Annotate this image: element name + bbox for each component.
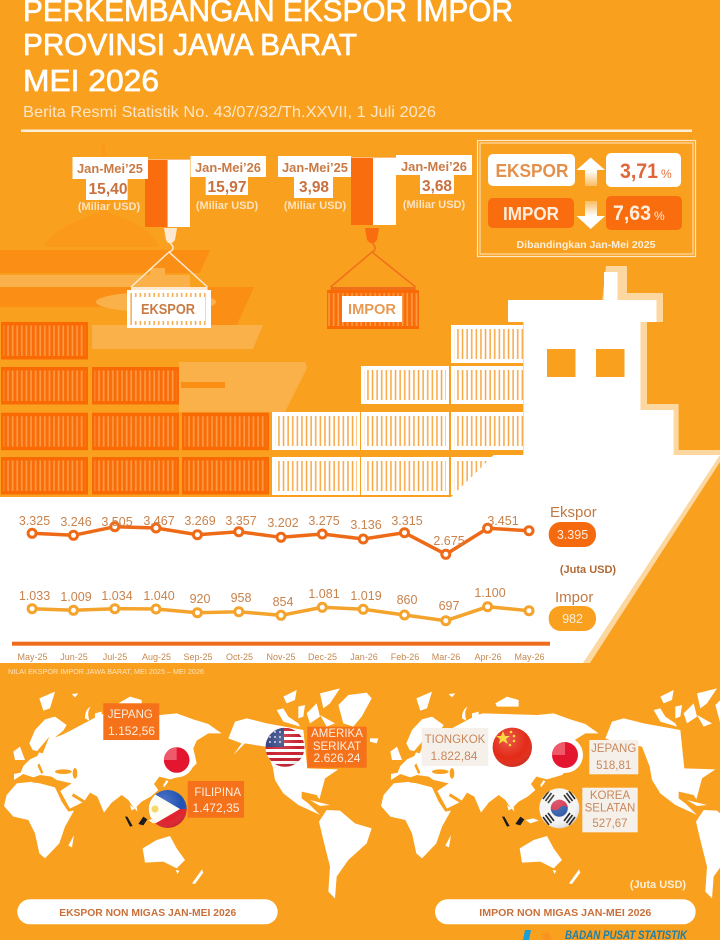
- line chart: impor: 860: [397, 593, 417, 607]
- unit note: map: (Juta USD): [630, 879, 686, 891]
- line chart: ekspor: 3.275: [308, 514, 340, 528]
- white import containers: [272, 325, 539, 497]
- world map: impor: [381, 688, 720, 898]
- line chart: ekspor: 3.325: [19, 514, 50, 528]
- faded port crane and dome backdrop: [0, 145, 307, 412]
- label: ekspor 2026: [190, 156, 266, 212]
- line chart: impor: 1.100: [474, 586, 506, 600]
- month labels: Jan-26: [350, 652, 378, 662]
- hanging container: ekspor: [127, 228, 211, 328]
- impor percent: %: [654, 209, 665, 223]
- callout: jepang ekspor: [103, 703, 159, 740]
- icon: china flag: [493, 728, 532, 767]
- ekspor percent: 3,71: [620, 160, 658, 183]
- orange export containers: [1, 322, 269, 494]
- month labels: Apr-26: [474, 652, 502, 662]
- callout: jepang impor: JEPANG: [591, 743, 636, 755]
- ekspor percent: %: [661, 167, 672, 181]
- title: [23, 0, 513, 98]
- callout: tiongkok: [422, 728, 488, 766]
- line chart: impor: 920: [190, 592, 210, 606]
- line chart: ekspor: 2.675: [433, 534, 465, 548]
- callout: filipina: FILIPINA: [194, 787, 241, 799]
- month labels: [17, 652, 545, 662]
- pill: ekspor non migas: EKSPOR NON MIGAS JAN-MEI 2026: [59, 907, 236, 919]
- label: impor 2025: Jan-Mei’25: [282, 160, 348, 175]
- line chart: impor: 1.081: [308, 587, 340, 601]
- crane: ekspor values: [72, 156, 266, 227]
- label: impor 2026: 3,68: [422, 178, 452, 195]
- comparison note: Dibandingkan Jan-Mei 2025: [516, 239, 656, 251]
- legend: impor: [549, 589, 596, 631]
- callout: jepang impor: [589, 740, 638, 774]
- panel: growth summary: [478, 140, 696, 256]
- line chart: impor: 958: [231, 591, 251, 605]
- month labels: Nov-25: [266, 652, 296, 662]
- callout: amerika serikat: [307, 727, 367, 768]
- impor percent: [606, 196, 682, 230]
- line chart: impor: 854: [273, 595, 293, 609]
- line chart: ekspor: 3.357: [225, 514, 257, 528]
- icon: usa flag: [265, 727, 305, 768]
- label: impor 2026: [396, 155, 472, 211]
- line chart: ekspor: 3.246: [60, 515, 92, 529]
- line chart: ekspor: [19, 514, 533, 558]
- impor percent: 7,63: [613, 202, 651, 225]
- month labels: Jul-25: [103, 652, 127, 662]
- icon: philippines flag: [148, 790, 187, 828]
- title: MEI 2026: [23, 63, 159, 98]
- chart axis: [12, 642, 550, 646]
- callout: korea selatan: KOREA: [590, 790, 630, 802]
- logo: badan pusat statistik: [523, 930, 688, 940]
- label: ekspor 2025: Jan-Mei’25: [77, 161, 143, 176]
- white hull and chart area: [0, 272, 720, 663]
- label: ekspor 2026: Jan-Mei’26: [195, 160, 261, 175]
- line chart: impor: [19, 586, 533, 625]
- month labels: May-26: [514, 652, 545, 662]
- icon: south korea flag: [539, 788, 580, 829]
- hanging container: ekspor: EKSPOR: [141, 301, 195, 318]
- chart caption: NILAI EKSPOR IMPOR JAWA BARAT, MEI 2025 – MEI 2026: [8, 669, 204, 676]
- legend: ekspor: [549, 504, 597, 547]
- line chart: impor: 697: [439, 599, 459, 613]
- callout: tiongkok: TIONGKOK: [425, 734, 486, 746]
- pill: impor non migas: [435, 899, 696, 924]
- hanging container: impor: IMPOR: [348, 301, 396, 318]
- label: impor 2026: (Miliar USD): [403, 199, 466, 211]
- line chart: ekspor: 3.505: [101, 515, 133, 529]
- callout: korea selatan: [582, 788, 638, 832]
- callout: jepang ekspor: 1.152,56: [108, 726, 155, 738]
- month labels: Mar-26: [432, 652, 460, 662]
- subtitle: Berita Resmi Statistik No. 43/07/32/Th.XXVII, 1 Juli 2026: [23, 104, 436, 121]
- callout: tiongkok: 1.822,84: [430, 751, 478, 763]
- title: PROVINSI JAWA BARAT: [23, 27, 357, 62]
- line chart: impor: 1.009: [60, 590, 92, 604]
- unit note: (Juta USD): [560, 564, 616, 576]
- line chart: impor: 1.033: [19, 589, 50, 603]
- callout: filipina: [188, 781, 244, 818]
- callout: amerika serikat: AMERIKA: [311, 728, 363, 740]
- month labels: Feb-26: [391, 652, 419, 662]
- callout: jepang impor: 518,81: [596, 760, 631, 772]
- impor label: IMPOR: [503, 204, 559, 224]
- label: ekspor 2026: 15,97: [208, 179, 247, 196]
- ship windows: [547, 349, 624, 377]
- label: impor 2025: [278, 156, 351, 212]
- callout: korea selatan: 527,67: [592, 818, 628, 830]
- month labels: Jun-25: [60, 652, 88, 662]
- month labels: May-25: [17, 652, 48, 662]
- month labels: Oct-25: [226, 652, 253, 662]
- label: impor 2026: Jan-Mei’26: [401, 159, 467, 174]
- ekspor label: EKSPOR: [496, 161, 568, 181]
- month labels: Dec-25: [308, 652, 337, 662]
- ekspor label: [488, 154, 575, 186]
- pill: ekspor non migas: [17, 899, 278, 924]
- label: impor 2025: 3,98: [299, 179, 329, 196]
- callout: amerika serikat: 2.626,24: [314, 753, 361, 765]
- month labels: Aug-25: [142, 652, 171, 662]
- line chart: ekspor: 3.451: [487, 514, 519, 528]
- ekspor percent: [606, 153, 681, 187]
- line chart: impor: 1.040: [143, 589, 175, 603]
- callout: korea selatan: SELATAN: [585, 802, 635, 814]
- line chart: ekspor: 3.202: [267, 516, 299, 530]
- impor label: [488, 198, 574, 228]
- icon: arrow down: [576, 201, 605, 229]
- legend: impor: Impor: [555, 589, 593, 606]
- bar pair: impor: [351, 157, 396, 225]
- label: ekspor 2025: [72, 157, 148, 213]
- line chart: ekspor: 3.136: [350, 518, 382, 532]
- bar pair: ekspor: [145, 159, 190, 227]
- icon: japan flag (ekspor): [159, 742, 194, 778]
- line chart: impor: 1.034: [101, 589, 133, 603]
- world map: ekspor: [4, 688, 378, 898]
- icon: arrow up: [576, 158, 605, 186]
- hanging container: impor: [327, 228, 419, 329]
- legend: ekspor: 3.395: [557, 528, 588, 542]
- callout: filipina: 1.472,35: [192, 803, 240, 815]
- line chart: ekspor: 3.315: [391, 514, 423, 528]
- icon: japan flag (impor): [547, 737, 583, 773]
- line chart: ekspor: 3.467: [143, 514, 175, 528]
- month labels: Sep-25: [183, 652, 213, 662]
- label: ekspor 2026: (Miliar USD): [196, 200, 259, 212]
- legend: ekspor: Ekspor: [550, 504, 597, 521]
- line chart: ekspor: 3.269: [184, 514, 216, 528]
- ship shadow: [583, 266, 720, 663]
- legend: impor: 982: [562, 612, 583, 626]
- crane: impor values: [278, 155, 472, 225]
- pill: impor non migas: IMPOR NON MIGAS JAN-MEI 2026: [479, 907, 651, 919]
- label: ekspor 2025: 15,40: [88, 181, 128, 198]
- callout: amerika serikat: SERIKAT: [313, 741, 361, 753]
- label: ekspor 2025: (Miliar USD): [78, 201, 141, 213]
- callout: jepang ekspor: JEPANG: [108, 709, 153, 721]
- line chart: impor: 1.019: [350, 589, 382, 603]
- label: impor 2025: (Miliar USD): [284, 200, 347, 212]
